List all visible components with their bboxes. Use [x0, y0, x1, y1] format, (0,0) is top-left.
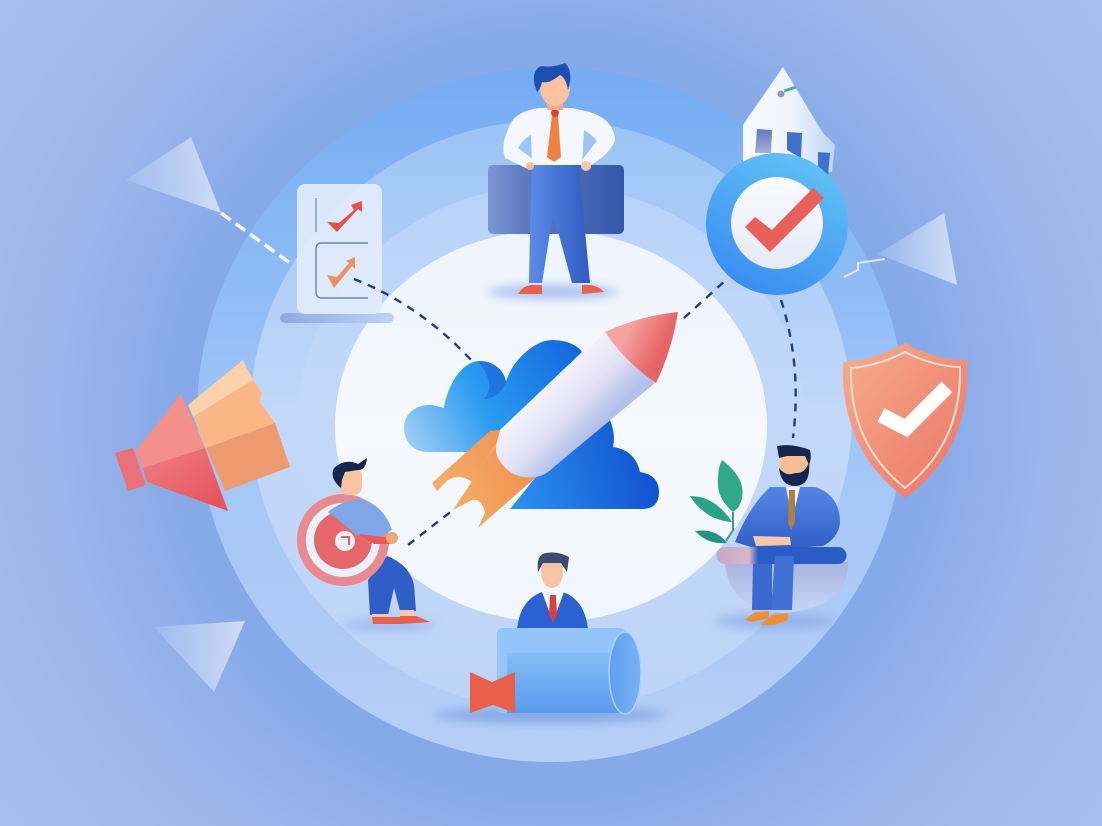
icon: check badge	[706, 153, 848, 295]
check row 2	[316, 243, 368, 298]
torso	[735, 487, 840, 550]
concentric rings	[197, 68, 905, 762]
shoes	[518, 285, 604, 294]
torso	[328, 499, 392, 538]
shoes	[745, 611, 788, 625]
person: bottom figure	[517, 552, 588, 629]
legs	[716, 547, 846, 564]
squiggle mark	[844, 259, 885, 277]
icon: shield	[843, 343, 967, 498]
tie	[547, 115, 561, 162]
flames	[432, 430, 536, 528]
person: target holder	[297, 458, 434, 631]
plant	[690, 460, 743, 543]
head	[779, 451, 809, 485]
trousers	[529, 164, 590, 283]
person: seated bearded man with plant	[690, 445, 848, 629]
rocket	[432, 312, 678, 528]
dashed connector lines	[221, 213, 796, 545]
seat	[725, 562, 848, 613]
rocket nose	[605, 312, 678, 383]
head	[340, 468, 362, 495]
check row 1	[316, 198, 362, 232]
legs	[368, 556, 416, 615]
triangle: lower left	[154, 621, 245, 692]
triangle: upper left	[126, 137, 221, 213]
shirt	[503, 108, 615, 170]
target	[297, 494, 389, 586]
person: top presenter	[487, 63, 624, 299]
head	[540, 70, 570, 106]
icon: megaphone	[115, 360, 290, 511]
cylinder	[435, 628, 665, 723]
triangle: upper right	[878, 213, 957, 285]
rocket body	[496, 332, 655, 477]
checklist card	[280, 184, 394, 323]
icon: house behind check badge	[743, 67, 835, 176]
cloud	[404, 340, 659, 509]
